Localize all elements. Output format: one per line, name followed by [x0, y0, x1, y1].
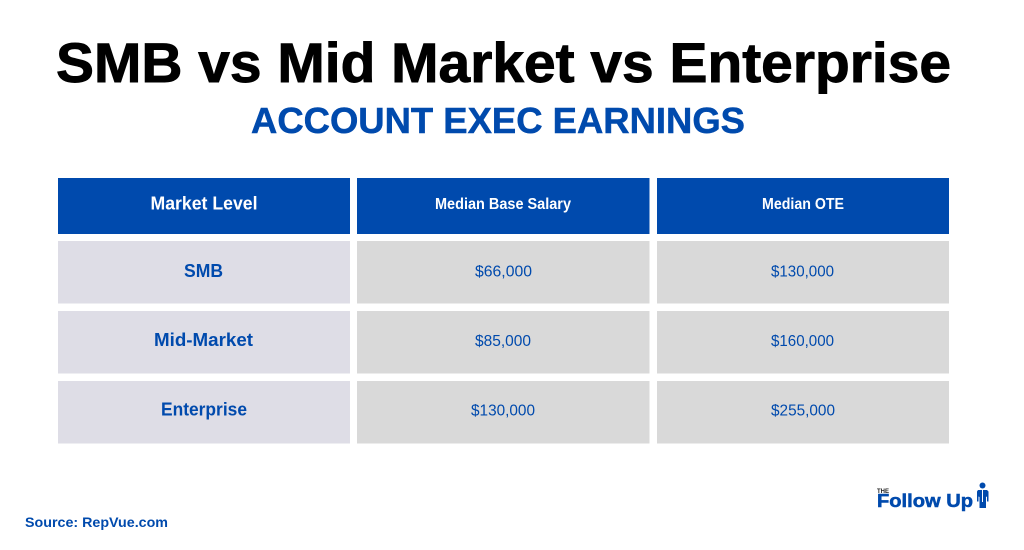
title: SMB vs Mid Market vs Enterprise	[56, 31, 951, 94]
row: SMB: SMB	[184, 261, 223, 281]
header: market level: Market Level	[150, 194, 258, 214]
row: Enterprise: Enterprise	[161, 400, 247, 420]
row: SMB	[58, 241, 949, 304]
logo: The Follow Up: THE	[877, 489, 889, 495]
icon: person	[977, 482, 988, 508]
table	[58, 178, 949, 444]
row: SMB: $66,000	[475, 264, 532, 280]
header: median base salary: Median Base Salary	[435, 196, 571, 213]
row: Mid-Market	[58, 311, 949, 374]
row: Enterprise: $130,000	[471, 402, 535, 420]
header: median OTE	[657, 178, 949, 234]
subtitle: ACCOUNT EXEC EARNINGS	[251, 100, 745, 141]
header: market level	[58, 178, 350, 234]
logo: The Follow Up	[877, 482, 988, 511]
row: Mid-Market: $160,000	[771, 333, 834, 350]
row: Enterprise: $255,000	[771, 402, 835, 420]
row: SMB: $130,000	[771, 264, 834, 280]
row: Mid-Market: $85,000	[475, 333, 531, 350]
logo: The Follow Up: Follow Up	[877, 491, 973, 511]
row: Enterprise	[58, 381, 949, 444]
source note: Source: RepVue.com	[25, 514, 168, 530]
row: Mid-Market: Mid-Market	[154, 330, 253, 350]
header: median OTE: Median OTE	[762, 196, 844, 213]
header: median base salary	[357, 178, 650, 234]
